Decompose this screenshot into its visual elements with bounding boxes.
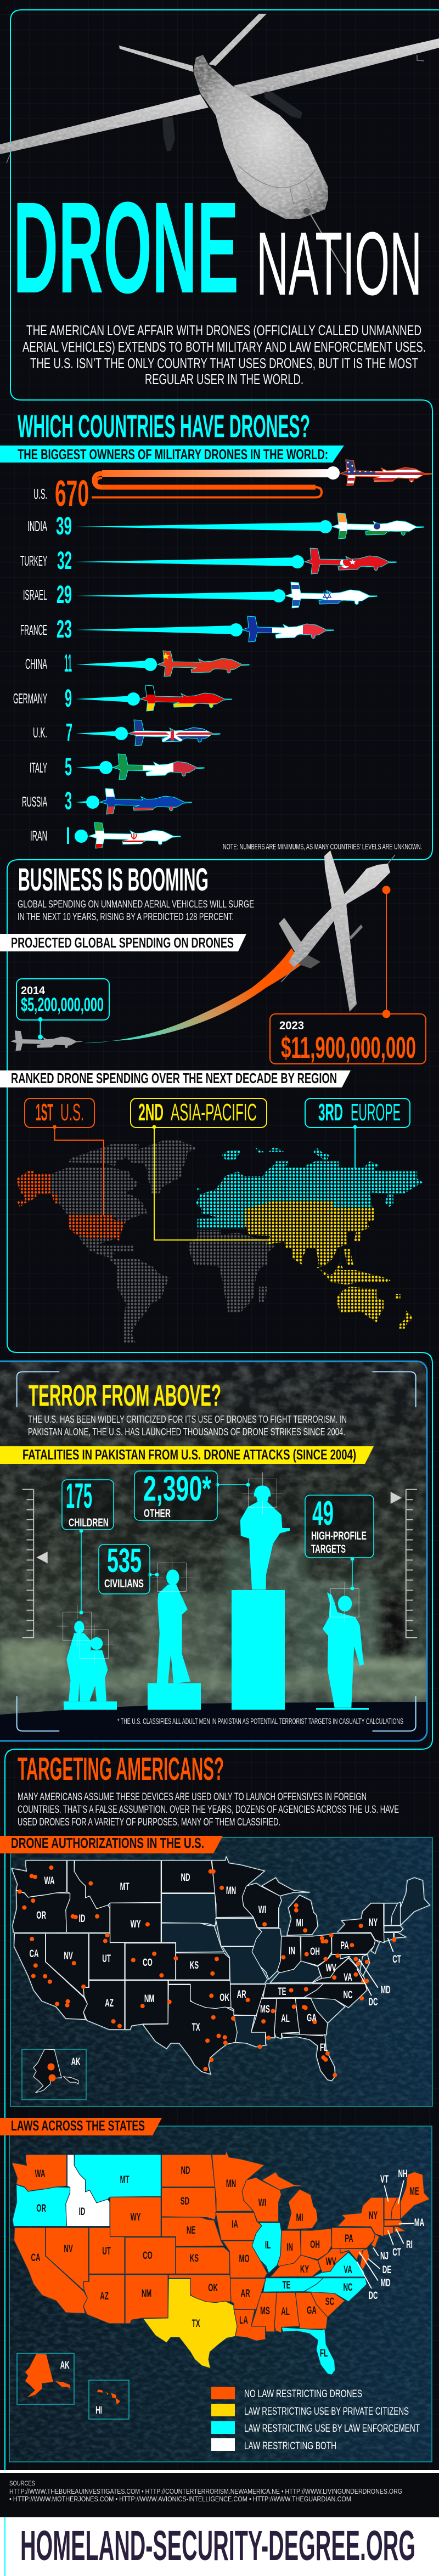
label box: 2nd Asia-Pacific: 2ND <box>138 1099 164 1126</box>
map 2 state labels: GA <box>307 2305 317 2316</box>
map 2 state labels: UT <box>102 2246 111 2257</box>
Hawaii inset: laws <box>89 2380 129 2419</box>
crosshair reticles <box>57 1473 365 1665</box>
map 2 state labels <box>31 2165 419 2359</box>
map 2 state labels: NY <box>369 2210 378 2222</box>
label box: 2nd Asia-Pacific <box>131 1098 267 1128</box>
map 1 state labels: IN <box>289 1946 295 1957</box>
map 1 state labels: MS <box>260 2004 270 2015</box>
map 1 state labels: AR <box>237 1989 246 2000</box>
text: false assumption: USED DRONES FOR A VARIETY OF PURPOSES, MANY OF THEM CLASSIFIED. <box>18 1817 280 1828</box>
panel border <box>0 1361 427 1741</box>
map 2 state labels: WY <box>131 2212 141 2223</box>
map 2 state labels: IL <box>265 2240 271 2251</box>
map 1 state labels: WA <box>44 1875 54 1887</box>
map 2 outside labels: DE <box>382 2264 391 2276</box>
row: Israel: ISRAEL <box>23 587 47 603</box>
map 2 state labels: KY <box>300 2264 309 2275</box>
panel: drone authorizations map <box>10 1837 432 2106</box>
map 2 state labels: WV <box>326 2256 336 2268</box>
map 1 state labels: MN <box>226 1885 236 1897</box>
stat: 175 children: 175 <box>66 1476 92 1515</box>
map 2 outside labels: CT <box>392 2247 401 2258</box>
map 2 state labels: TX <box>192 2318 200 2330</box>
map 2 state labels: TE <box>282 2280 291 2291</box>
map 1 state labels: AL <box>281 2013 290 2025</box>
map 1 state labels: NC <box>343 1989 353 2001</box>
Alaska inset: laws <box>17 2353 74 2404</box>
callout: 2023 <box>270 1014 426 1064</box>
label box: 1st U.S.: 1ST <box>36 1099 53 1126</box>
row: Italy: ITALY <box>30 759 47 776</box>
row: India <box>27 512 424 540</box>
map 2 state labels: WA <box>35 2168 45 2180</box>
map 2 state labels: CA <box>31 2252 41 2264</box>
heading: targeting Americans: TARGETING AMERICANS? <box>18 1751 224 1787</box>
banner: drone authorizations <box>0 1835 223 1853</box>
Hawaii inset: laws: HI <box>95 2405 102 2416</box>
map 2 outside labels: MD <box>380 2278 391 2289</box>
map 1 state labels: ND <box>181 1872 190 1884</box>
row: U.K.: U.K. <box>33 724 47 741</box>
row: U.K. <box>33 718 220 746</box>
map 2 state labels: MI <box>296 2212 303 2224</box>
panel: laws across the states map <box>9 2126 432 2462</box>
text: global spending: GLOBAL SPENDING ON UNMANNED AERIAL VEHICLES WILL SURGE <box>18 899 254 910</box>
row: Germany: GERMANY <box>13 690 47 707</box>
row: U.K.: 7 <box>66 718 72 746</box>
map 2 state labels: OH <box>310 2239 320 2251</box>
map 2 state labels: PA <box>345 2233 353 2245</box>
row: Iran <box>30 822 181 849</box>
row: France: 23 <box>57 615 72 643</box>
map 2 state labels: IA <box>232 2219 238 2230</box>
map 2 state labels: OR <box>36 2203 46 2214</box>
row: Israel: 29 <box>57 580 72 608</box>
sources block <box>0 2470 439 2517</box>
row: Germany <box>13 684 232 712</box>
callout: 2014 <box>16 979 109 1020</box>
map 1 leader lines <box>357 1938 393 1996</box>
row: Israel <box>23 580 377 608</box>
map 2 state labels: ME <box>409 2186 419 2197</box>
stat: 2,390 other <box>134 1469 250 1520</box>
map 2 outside labels: NJ <box>380 2251 389 2262</box>
heading: terror from above: TERROR FROM ABOVE? <box>29 1378 221 1412</box>
map 1 state labels: CT <box>392 1954 401 1965</box>
Alaska inset: AK <box>71 2056 81 2068</box>
map 1 state labels: OR <box>36 1910 46 1921</box>
map 2 state labels: FL <box>320 2348 328 2359</box>
map 2 state labels: MT <box>120 2174 130 2186</box>
map 1 state labels: OH <box>310 1946 320 1958</box>
connector 2023 <box>382 886 391 1018</box>
authorization points <box>20 1868 394 2075</box>
map 2 outside labels: RI <box>406 2239 413 2251</box>
map 1 state labels: AZ <box>105 1998 114 2009</box>
map 1 state labels: KS <box>190 1960 199 1971</box>
text: global spending: IN THE NEXT 10 YEARS, RISING BY A PREDICTED 128 PERCENT. <box>18 911 234 922</box>
map 1 state labels <box>29 1872 401 2054</box>
Alaska inset <box>22 2049 86 2100</box>
map 1 state labels: MD <box>380 1985 391 1996</box>
stat: 49 high-profile targets <box>305 1495 374 1590</box>
row: China: CHINA <box>25 656 47 672</box>
callout: 2023: 2023 <box>279 1019 304 1032</box>
small drone 2014 <box>10 1030 82 1051</box>
map 2 state labels: CO <box>143 2250 153 2262</box>
heading: business is booming: BUSINESS IS BOOMING <box>18 862 209 898</box>
map 2 leader lines <box>357 2180 414 2288</box>
row: Iran: IRAN <box>30 827 47 844</box>
map 2 state labels: AL <box>281 2306 290 2318</box>
map 2 state labels: MS <box>260 2306 270 2317</box>
map 1 state labels: DC <box>368 1997 378 2008</box>
map 1 state labels: OK <box>219 1992 229 2004</box>
map 1 state labels: WV <box>326 1963 336 1974</box>
callout: 2014: 2014 <box>21 985 46 997</box>
row: U.S. <box>34 459 432 506</box>
stat: 535 civilians <box>99 1542 159 1594</box>
banner: drone authorizations: DRONE AUTHORIZATIONS IN THE U.S. <box>11 1835 204 1851</box>
intro text <box>22 322 426 387</box>
map 1 state labels: TE <box>278 1986 286 1998</box>
map 1 state labels: UT <box>102 1953 111 1965</box>
connector 2014 <box>38 1017 43 1039</box>
row: Russia: 3 <box>65 787 72 815</box>
row: Germany: 9 <box>65 684 72 712</box>
row: Turkey: 32 <box>57 546 72 574</box>
map 2 state labels: AZ <box>100 2291 109 2302</box>
text: false assumption <box>18 1791 399 1828</box>
row: Italy <box>30 753 204 781</box>
map 2 state labels: MN <box>226 2178 236 2190</box>
banner: projected spending: PROJECTED GLOBAL SPENDING ON DRONES <box>11 934 234 951</box>
hero drone illustration <box>0 14 439 273</box>
map 2 outside labels: NH <box>398 2168 408 2180</box>
map 2 state labels: SC <box>325 2296 334 2308</box>
map 1 state labels: GA <box>307 2013 317 2024</box>
map 2 outside labels: VT <box>380 2174 389 2185</box>
banner: laws across the states: LAWS ACROSS THE STATES <box>11 2117 145 2134</box>
map 2 outside labels: MA <box>414 2217 424 2229</box>
map 2 state labels: NV <box>64 2244 73 2255</box>
map region: Europe and Russia <box>196 1148 423 1228</box>
growth curve <box>83 948 302 1043</box>
map 2 state labels: KS <box>190 2253 199 2264</box>
map 2 state labels: ND <box>181 2165 190 2177</box>
label box: 3rd Europe <box>305 1098 410 1128</box>
stat: 175 children <box>62 1476 114 1614</box>
map 1 state labels: FL <box>320 2042 328 2054</box>
Alaska inset: laws: AK <box>60 2360 70 2371</box>
row: U.S.: 670 <box>55 473 89 514</box>
sources block: • HTTP://WWW.MOTHERJONES.COM • HTTP://WWW.AVIONICS-INTELLIGENCE.COM • HTTP://WWW.THEGUARDIAN.COM <box>9 2495 351 2503</box>
map 1 state labels: WI <box>258 1904 266 1916</box>
map 1 state labels: CO <box>143 1957 153 1969</box>
pedestals and silhouettes <box>64 1485 369 1710</box>
label box: 1st U.S.: U.S. <box>60 1099 84 1126</box>
stat: 2,390 other: OTHER <box>144 1507 171 1520</box>
map 1 state labels: MI <box>296 1918 303 1929</box>
label box: 1st U.S. <box>25 1098 94 1128</box>
stat: 49 high-profile targets: TARGETS <box>311 1543 346 1555</box>
label box: 2nd Asia-Pacific: ASIA-PACIFIC <box>171 1099 257 1126</box>
map 1 state labels: WY <box>131 1919 141 1930</box>
viewfinder brackets and scales <box>17 1372 417 1731</box>
map 2 state labels: NC <box>343 2282 353 2293</box>
map 2 state labels: AR <box>241 2288 250 2299</box>
map 2 state labels: NM <box>142 2288 151 2299</box>
text: global spending <box>18 899 254 922</box>
label box: 3rd Europe: 3RD <box>318 1099 343 1126</box>
map 1 state labels: TX <box>192 2022 200 2033</box>
stat: 175 children: CHILDREN <box>69 1517 109 1529</box>
row: Russia <box>22 787 192 815</box>
stat: 535 civilians: CIVILIANS <box>104 1577 144 1590</box>
map 1 state labels: MT <box>120 1881 130 1893</box>
map 1 state labels: PA <box>340 1940 349 1952</box>
banner: projected spending <box>0 934 246 951</box>
map 2 state labels: VA <box>344 2264 352 2276</box>
stat: 2,390 other: 2,390* <box>143 1469 211 1508</box>
legend: LAW RESTRICTING BOTH <box>244 2440 336 2452</box>
row: Turkey: TURKEY <box>20 553 47 569</box>
map 2 outside labels: DC <box>368 2290 378 2302</box>
panel: terror from above <box>0 1361 439 1745</box>
map 1 state labels: CA <box>29 1948 39 1960</box>
map 1 state labels: ID <box>79 1913 85 1925</box>
map 2 state labels: NE <box>187 2225 195 2236</box>
row: Russia: RUSSIA <box>22 793 47 810</box>
map 2 outside labels <box>368 2168 424 2302</box>
row: U.S.: U.S. <box>33 486 47 502</box>
row: India: INDIA <box>27 518 47 534</box>
text: criticism <box>28 1414 347 1438</box>
row: France: FRANCE <box>20 622 47 638</box>
stat: 535 civilians: 535 <box>107 1542 142 1579</box>
row: China <box>25 649 249 677</box>
map 2 state labels: MO <box>239 2253 249 2265</box>
map 2 state labels: SD <box>181 2196 189 2207</box>
intro text: REGULAR USER IN THE WORLD. <box>145 371 303 387</box>
map region: Asia-Pacific <box>245 1202 413 1329</box>
row: China: 11 <box>64 649 72 677</box>
sources block: SOURCES <box>9 2479 35 2487</box>
row: India: 39 <box>56 512 72 540</box>
map 2 state labels: ID <box>79 2206 85 2218</box>
row: France <box>20 615 334 643</box>
legend: NO LAW RESTRICTING DRONES <box>244 2388 362 2400</box>
stat: 49 high-profile targets: 49 <box>312 1495 334 1532</box>
row: Italy: 5 <box>65 753 72 781</box>
map 2 state labels: LA <box>239 2315 248 2326</box>
callout: 2014: $5,200,000,000 <box>21 994 104 1016</box>
row: Turkey <box>20 546 396 574</box>
map 2 state labels: OK <box>208 2282 218 2294</box>
stat: 49 high-profile targets: HIGH-PROFILE <box>311 1530 367 1542</box>
map 1 state labels: NY <box>369 1917 378 1929</box>
map connectors <box>53 1125 357 1240</box>
top-down drone <box>279 850 395 1012</box>
banner: laws across the states <box>0 2117 162 2135</box>
map 1 state labels: NM <box>144 1993 154 2005</box>
map 1 state labels: NV <box>64 1951 73 1962</box>
map region: other land <box>50 1140 274 1343</box>
map region: U.S. <box>18 1171 125 1241</box>
map 1 state labels: VA <box>344 1972 352 1983</box>
legend <box>211 2387 420 2452</box>
map 2 state labels: WI <box>258 2197 266 2209</box>
map 2 state labels: IN <box>286 2242 293 2253</box>
